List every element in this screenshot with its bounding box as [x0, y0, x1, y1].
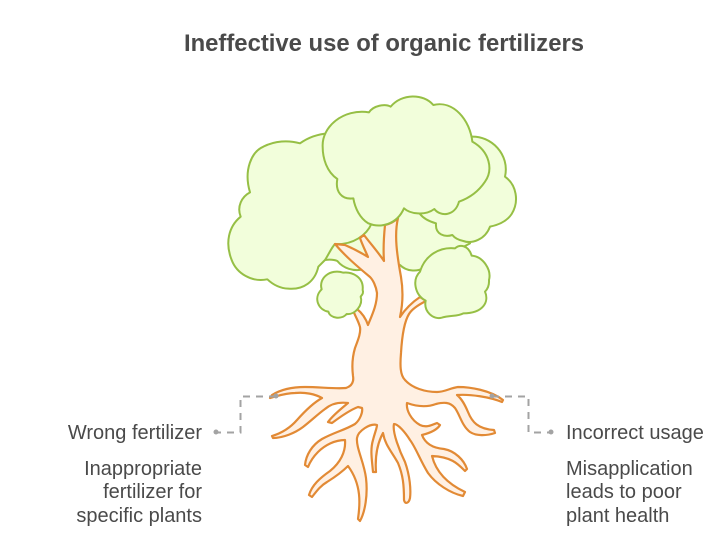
text: incorrect usage description: leads to poor: [566, 481, 682, 503]
trunk and roots: [270, 218, 503, 521]
canopy: left foliage: [228, 133, 372, 289]
canopy: main top foliage: [323, 96, 489, 225]
tree illustration: [228, 96, 516, 521]
text: wrong fertilizer description: Inappropriate: [84, 458, 202, 480]
connector: left: [214, 394, 278, 434]
title: Ineffective use of organic fertilizers: [184, 30, 584, 57]
label: wrong fertilizer: Wrong fertilizer: [68, 422, 202, 444]
text: wrong fertilizer description: specific plants: [76, 505, 202, 527]
canopy: back right foliage: [420, 137, 516, 242]
canopy: small left foliage: [317, 272, 363, 318]
text: incorrect usage description: Misapplication: [566, 458, 693, 480]
canopy: back middle foliage: [325, 190, 470, 271]
text: wrong fertilizer description: fertilizer for: [103, 481, 202, 503]
label: incorrect usage: Incorrect usage: [566, 422, 704, 444]
text: incorrect usage description: plant health: [566, 505, 669, 527]
connector: right: [490, 394, 554, 434]
canopy: small right foliage: [415, 246, 489, 318]
